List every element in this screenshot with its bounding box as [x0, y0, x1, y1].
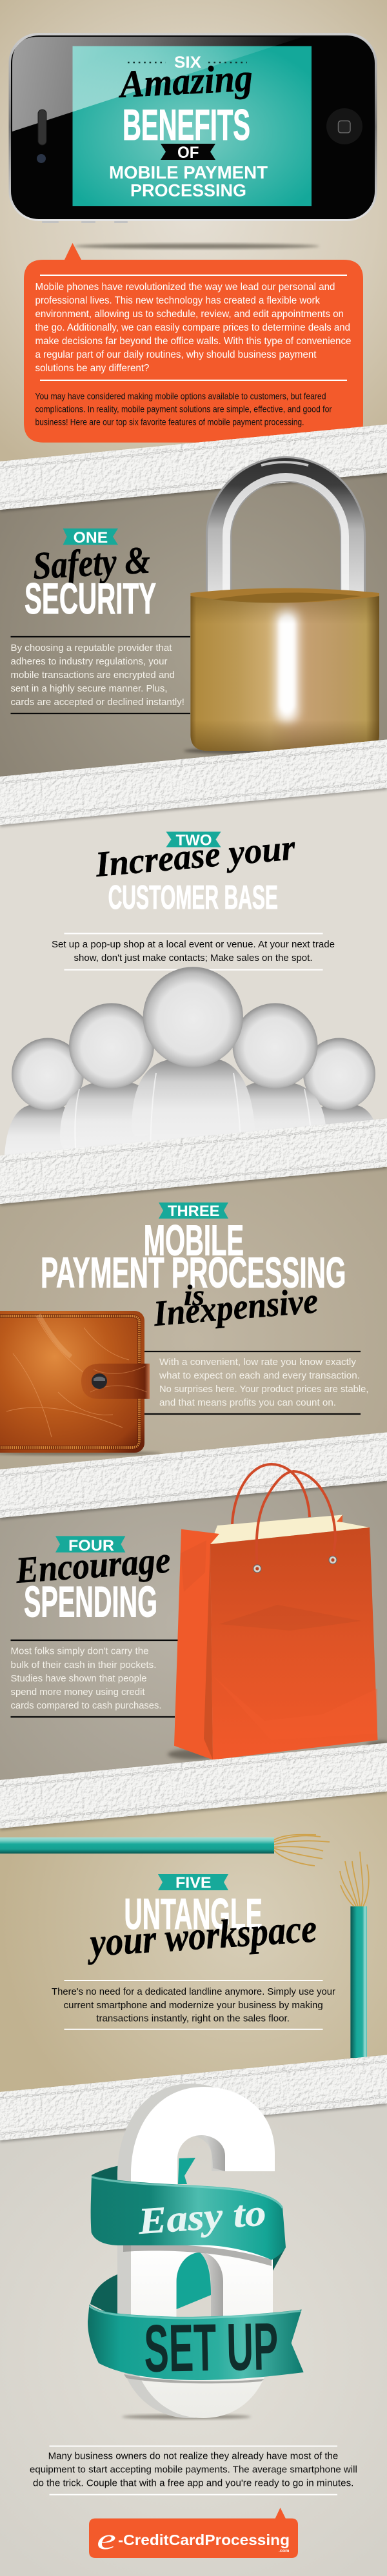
illustration: vertical wire	[340, 1852, 369, 2058]
teal flag inside six	[178, 2158, 195, 2184]
section three body	[159, 1357, 368, 1408]
logo badge	[89, 2508, 298, 2558]
leather band 1	[0, 424, 387, 512]
section two text	[52, 828, 335, 970]
six front face	[131, 2087, 275, 2418]
ribbon: five: FIVE	[175, 1874, 212, 1892]
section three body: what to expect on each and every transaction.	[159, 1371, 360, 1381]
section four body: Studies have shown that people	[10, 1674, 146, 1684]
intro paragraph: solutions be any different?	[35, 363, 150, 374]
phone camera	[37, 154, 46, 163]
ribbon: four: FOUR	[68, 1537, 114, 1554]
title: processing: PROCESSING	[130, 180, 246, 200]
person left	[60, 1003, 177, 1160]
upper ribbon	[91, 2176, 286, 2260]
ribbon: four	[55, 1536, 125, 1554]
panel: intro speech box	[24, 243, 363, 443]
closing body	[30, 2450, 357, 2488]
logo e mark: e	[97, 2523, 116, 2555]
set up text: SET UP	[143, 2309, 279, 2387]
phone side buttons	[42, 221, 128, 223]
section one body: By choosing a reputable provider that	[10, 643, 172, 654]
intro paragraph: professional lives. This new technology has created a flexible work	[35, 295, 320, 306]
closing text	[30, 2446, 357, 2495]
bag front	[210, 1527, 378, 1759]
intro second paragraph	[35, 391, 332, 427]
person far left	[4, 1038, 90, 1167]
section two body	[52, 940, 335, 964]
wallet clasp	[81, 1364, 150, 1399]
section five body: transactions instantly, right on the sales floor.	[96, 2014, 290, 2024]
phone home button	[326, 108, 362, 144]
closing body: do the trick. Couple that with a free app and you're ready to go in minutes.	[33, 2477, 353, 2488]
ribbon: five	[158, 1874, 228, 1892]
illustration: group of people	[4, 967, 382, 1167]
title: benefits: BENEFITS	[123, 101, 250, 150]
section one body: sent in a highly secure manner. Plus,	[10, 684, 168, 694]
heading: mobile: MOBILE	[144, 1217, 244, 1265]
six lower counter	[177, 2252, 223, 2320]
phone screen	[72, 46, 312, 206]
section two body: show, don't just make contacts; Make sales on the spot.	[74, 953, 312, 964]
section four body: bulk of their cash in their pockets.	[10, 1660, 157, 1671]
person center	[132, 967, 255, 1160]
leather band 2	[0, 740, 387, 827]
gold strands horizontal	[274, 1835, 330, 1866]
phone glare	[12, 37, 303, 131]
logo wordmark: -CreditCardProcessing	[118, 2532, 290, 2548]
person right	[209, 1003, 326, 1160]
heading: untangle: UNTANGLE	[124, 1890, 263, 1939]
section three body: and that means profits you can count on.	[159, 1398, 336, 1408]
bag interior	[210, 1515, 370, 1544]
heading: your workspace: your workspace	[84, 1906, 318, 1965]
padlock shackle	[219, 462, 353, 593]
section one text	[10, 528, 190, 713]
heading: safety and: Safety &	[32, 539, 151, 587]
intro paragraph: a regular part of our daily routines, why should business payment	[35, 349, 317, 360]
section one body: mobile transactions are encrypted and	[10, 670, 175, 681]
ribbon: two: TWO	[175, 831, 212, 849]
lower ribbon	[88, 2305, 304, 2380]
section four text	[10, 1536, 178, 1717]
illustration: big number six with ribbons	[88, 2084, 304, 2419]
closing body: Many business owners do not realize they already have most of the	[48, 2450, 338, 2462]
section four body	[10, 1647, 161, 1711]
section four body: Most folks simply don't carry the	[10, 1647, 148, 1657]
easy to text: Easy to	[136, 2191, 267, 2242]
ribbon: two	[166, 831, 221, 849]
heading: inexpensive: Inexpensive	[152, 1281, 319, 1334]
closing body: equipment to start accepting mobile payments. The average smartphone will	[30, 2464, 357, 2475]
illustration: wallet	[0, 1311, 161, 1455]
section five body	[52, 1987, 335, 2024]
illustration: shopping bag	[168, 1464, 387, 1759]
logo dot com: .com	[279, 2549, 289, 2553]
intro second paragraph: complications. In reality, mobile payment solutions are simple, effective, and good for	[35, 403, 332, 414]
heading: increase your: Increase your	[94, 828, 297, 885]
ribbon: one	[63, 528, 118, 547]
section four body: spend more money using credit	[10, 1687, 144, 1698]
ribbon: of: OF	[177, 144, 199, 162]
ribbon: three: THREE	[168, 1203, 219, 1220]
six back ribbon tails	[90, 2165, 286, 2320]
section two body: Set up a pop-up shop at a local event or venue. At your next trade	[52, 940, 335, 950]
front handle	[257, 1471, 335, 1568]
leather band 5	[0, 1743, 387, 1830]
illustration: padlock	[184, 462, 379, 754]
heading: encourage: Encourage	[14, 1538, 172, 1591]
section one body: adheres to industry regulations, your	[10, 657, 168, 667]
phone shadow	[74, 244, 319, 249]
section three body: No surprises here. Your product prices are stable,	[159, 1384, 369, 1395]
section five text	[52, 1874, 335, 2029]
six depth	[117, 2084, 261, 2418]
padlock body	[184, 588, 379, 754]
ribbon: one: ONE	[74, 529, 108, 547]
intro paragraph: the go. Additionally, we can easily compare prices to determine deals and	[35, 322, 350, 333]
intro second paragraph: business! Here are our top six favorite features of mobile payment processing.	[35, 416, 304, 427]
leather band 4	[0, 1432, 387, 1520]
title text	[109, 53, 268, 200]
leather band 6	[0, 2055, 387, 2142]
title: amazing: Amazing	[116, 56, 253, 106]
phone speaker	[38, 110, 46, 145]
bag side panel	[174, 1529, 219, 1759]
six upper counter side	[203, 2135, 225, 2171]
rear handle	[232, 1464, 310, 1524]
intro paragraph: Mobile phones have revolutionized the way we lead our personal and	[35, 282, 335, 293]
ribbon shadow	[123, 2244, 272, 2266]
gold strands vertical	[340, 1852, 369, 1906]
section one body	[10, 643, 184, 708]
dotted rule left	[128, 62, 166, 63]
intro paragraph	[35, 282, 351, 374]
heading: spending: SPENDING	[24, 1578, 157, 1627]
section five body: current smartphone and modernize your business by making	[64, 2000, 323, 2011]
section three text	[41, 1203, 369, 1414]
section four body: cards compared to cash purchases.	[10, 1701, 161, 1711]
heading: security: SECURITY	[25, 574, 156, 623]
phone illustration with title	[9, 33, 377, 223]
intro paragraph: make decisions far beyond the office walls. With this type of convenience	[35, 336, 351, 347]
heading: is: is	[184, 1279, 204, 1312]
section three body: With a convenient, low rate you know exactly	[159, 1357, 357, 1368]
intro second paragraph: You may have considered making mobile options available to customers, but feared	[35, 391, 326, 401]
title: six: SIX	[174, 53, 201, 72]
six ground shadow	[122, 2414, 251, 2419]
intro paragraph: environment, allowing us to schedule, review, and edit appointments on	[35, 309, 344, 320]
person far right	[296, 1038, 382, 1167]
ribbon: of	[161, 144, 215, 162]
title: mobile payment: MOBILE PAYMENT	[109, 162, 268, 182]
section one body: cards are accepted or declined instantly!	[10, 697, 184, 708]
leather band 3	[0, 1119, 387, 1206]
dotted rule right	[208, 62, 247, 63]
illustration: horizontal wire	[0, 1835, 330, 1866]
eyelets	[253, 1556, 337, 1573]
section five body: There's no need for a dedicated landline anymore. Simply use your	[52, 1987, 335, 1997]
